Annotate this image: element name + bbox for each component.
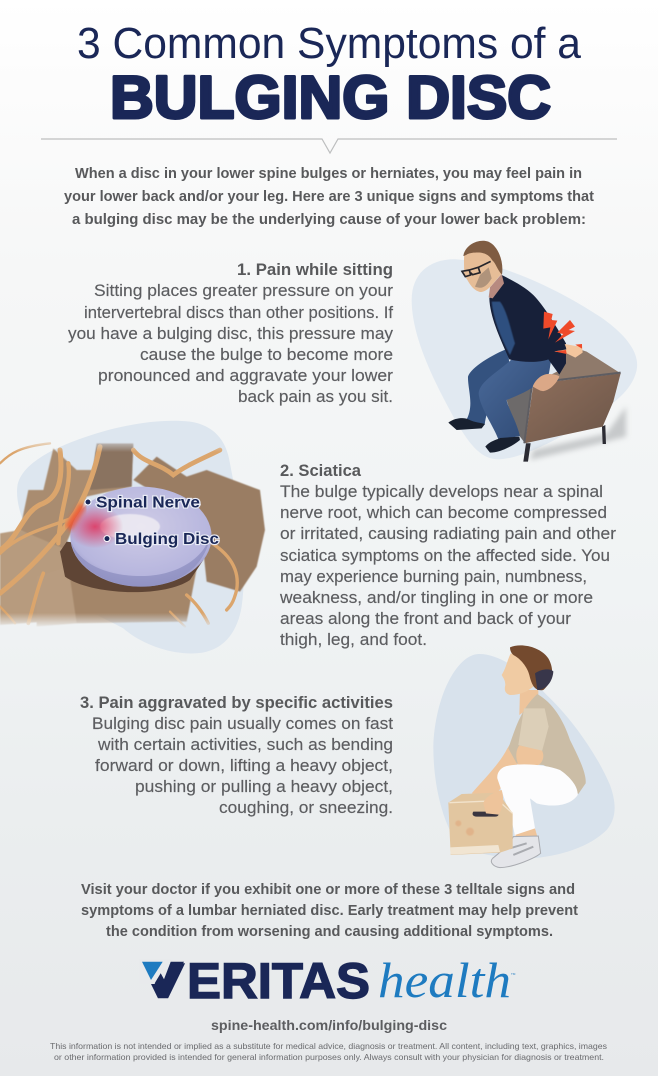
logo: Veritas Health: health [378,952,511,1008]
body: sciatica: The bulge typically develops near a spinal [280,483,603,501]
body: pain while sitting: pronounced and aggravate your lower [98,367,394,385]
title: 3 Common Symptoms of a [77,19,581,68]
woman [448,645,586,868]
body: pain while sitting: back pain as you sit. [238,388,393,406]
box [448,793,513,855]
closing text: symptoms of a lumbar herniated disc. Early treatment may help prevent [81,902,578,919]
closing text: the condition from worsening and causing additional symptoms. [106,923,553,940]
body: pain while sitting: cause the bulge to become more [140,346,393,364]
logo: Veritas Health: ERITAS [187,953,370,1009]
bones [0,443,265,627]
man [448,241,566,453]
disclaimer: or other information provided is intended for general information purposes only. Always consult with your physician for diagnosis or treatment. [54,1052,604,1062]
illustration: man sitting down with back pain [412,241,637,462]
closing text: Visit your doctor if you exhibit one or more of these 3 telltale signs and [81,881,575,898]
disclaimer: This information is not intended or implied as a substitute for medical advice, diagnosis or treatment. All content, including text, graphics, images [50,1041,607,1051]
body: sciatica: areas along the front and back of your [280,610,572,628]
logo: Veritas Health: TM [511,972,516,976]
body: pain aggravated by activities [92,715,393,817]
body: pain while sitting: intervertebral discs than other positions. If [84,304,393,322]
illustration: lumbar spine with bulging disc [0,421,265,653]
body: sciatica: or irritated, causing radiating pain and other [280,525,617,543]
heading: pain aggravated by activities: 3. Pain aggravated by specific activities [80,694,393,712]
body: sciatica [279,483,617,649]
disc [70,487,212,587]
divider with pointer [41,139,617,153]
body: pain while sitting [68,282,394,406]
blob background [412,259,637,459]
intro text [64,165,594,228]
heading: sciatica: 2. Sciatica [280,462,362,480]
body: sciatica: weakness, and/or tingling in one or more [279,589,593,607]
intro text: your lower back and/or your leg. Here are 3 unique signs and symptoms that [64,188,594,205]
blob background [433,654,615,858]
illustration: woman lifting a box [433,645,615,868]
nerve irritation [67,505,123,548]
body: pain aggravated by activities: Bulging disc pain usually comes on fast [92,715,393,733]
body: sciatica: may experience burning pain, numbness, [280,568,587,586]
panel: symptom 3 text [80,694,393,817]
body: sciatica: thigh, leg, and foot. [280,631,427,649]
nerves [0,443,237,627]
chair shadow [530,407,626,460]
body: pain while sitting: Sitting places greater pressure on your [94,282,394,300]
title: BULGING DISC [110,64,551,131]
body: pain aggravated by activities: pushing or pulling a heavy object, [135,778,393,796]
body: pain aggravated by activities: coughing, or sneezing. [219,799,393,817]
body: sciatica: nerve root, which can become compressed [280,504,607,522]
body: pain aggravated by activities: with certain activities, such as bending [97,736,393,754]
source url: spine-health.com/info/bulging-disc [211,1017,447,1033]
body: pain while sitting: you have a bulging disc, this pressure may [68,325,394,343]
body: pain aggravated by activities: forward or down, lifting a heavy object, [95,757,393,775]
chair [507,345,621,462]
intro text: a bulging disc may be the underlying cause of your lower back problem: [72,211,586,228]
logo: Veritas Health [139,952,516,1009]
spine anatomy [0,443,265,627]
icon: pain bolts [543,312,583,358]
disclaimer [50,1041,607,1062]
body: sciatica: sciatica symptoms on the affected side. You [280,547,610,565]
label: spinal nerve: Spinal Nerve [96,494,200,511]
intro text: When a disc in your lower spine bulges or herniates, you may feel pain in [75,165,582,182]
title [77,19,581,131]
panel: symptom 1 text [68,261,394,406]
panel: symptom 2 text [279,462,617,649]
closing text [81,881,578,940]
logo: Veritas Health: V [141,953,186,1009]
heading: pain while sitting: 1. Pain while sitting [237,261,393,279]
label: bulging disc: Bulging Disc [115,531,219,548]
blob background [17,421,244,653]
